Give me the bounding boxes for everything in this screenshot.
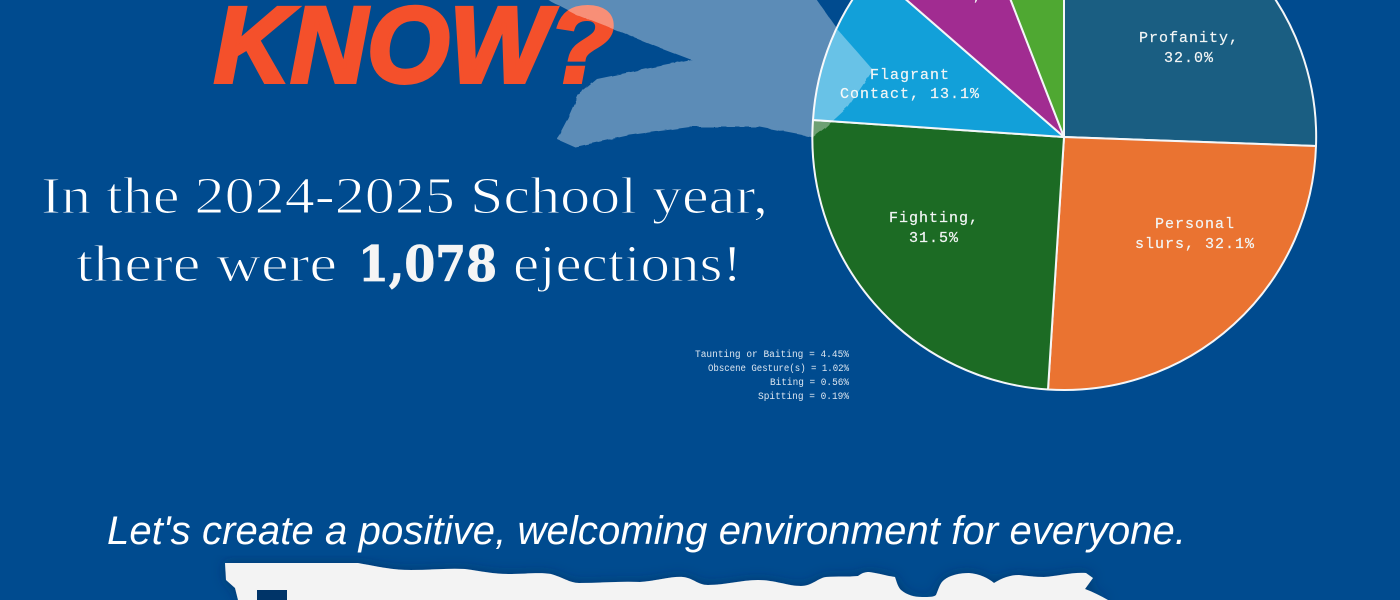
- slice: flagrant contact: [813, 0, 1064, 137]
- label: profanity: 32.0%: [1164, 50, 1214, 67]
- number: 1,078: 1,078: [358, 235, 497, 293]
- slice: light green category: [973, 0, 1064, 137]
- legend: minor categories: [695, 349, 849, 403]
- tagline: Let's create a positive, welcoming environment for everyone.: [107, 509, 1186, 553]
- label: personal slurs: Personal: [1155, 216, 1235, 233]
- legend line: biting: Biting = 0.56%: [770, 377, 849, 389]
- line one: In the 2024-2025 School year,: [41, 168, 768, 225]
- label: fighting: 31.5%: [909, 230, 959, 247]
- label: flagrant contact: Flagrant: [870, 67, 950, 84]
- legend line: taunting: Taunting or Baiting = 4.45%: [695, 349, 849, 361]
- legend line: obscene gestures: Obscene Gesture(s) = 1.02%: [708, 363, 849, 375]
- label: profanity: Profanity,: [1139, 30, 1239, 47]
- slice: fighting: [812, 120, 1064, 390]
- legend line: spitting: Spitting = 0.19%: [758, 391, 849, 403]
- pie chart: ejection reasons: [812, 0, 1316, 390]
- pie labels: [840, 0, 1255, 253]
- line two start: there were: [76, 236, 337, 293]
- icon: translucent brush arrow: [537, 0, 873, 147]
- torn paper panel: [225, 563, 1108, 600]
- dark square on paper: [257, 590, 287, 600]
- label: personal slurs: slurs, 32.1%: [1135, 236, 1255, 253]
- text: school year statement: [41, 168, 768, 293]
- slice: purple category: [874, 0, 1064, 137]
- slice: profanity: [1064, 0, 1316, 146]
- line two end: ejections!: [513, 236, 742, 293]
- label: flagrant contact: Contact, 13.1%: [840, 86, 980, 103]
- label: fighting: Fighting,: [889, 210, 979, 227]
- slice: personal slurs: [1048, 137, 1316, 390]
